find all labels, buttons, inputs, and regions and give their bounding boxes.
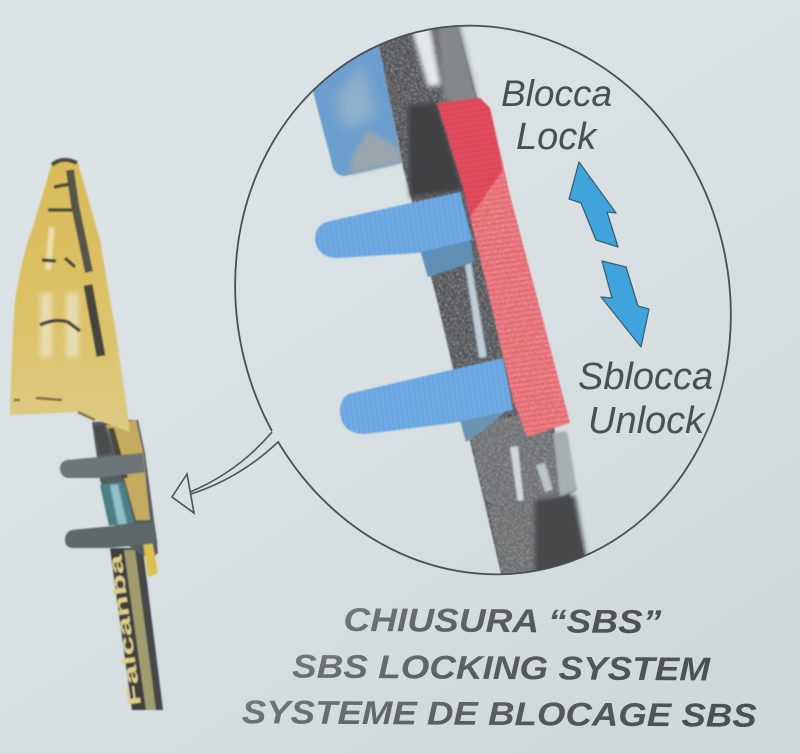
- lower shaft: [105, 548, 163, 710]
- yellow cone: [10, 158, 130, 432]
- label: Sblocca / Unlock: Sblocca: [578, 356, 713, 398]
- label: Sblocca / Unlock: [578, 356, 713, 442]
- caption: SBS LOCKING SYSTEM: [292, 648, 712, 687]
- lower clear sleeve: [470, 416, 589, 574]
- caption: SYSTEME DE BLOCAGE SBS: [242, 693, 757, 734]
- blue lever upper: [315, 192, 474, 277]
- caption: [242, 600, 758, 734]
- product: complete device on the left: [10, 158, 163, 710]
- grey lever upper: [60, 453, 145, 478]
- label: Sblocca / Unlock: Unlock: [588, 400, 706, 442]
- magnified detail inside the circle: [310, 15, 592, 590]
- grey lever lower: [65, 522, 157, 548]
- caption: CHIUSURA “SBS”: [343, 601, 662, 640]
- dark shaft: [375, 15, 592, 590]
- locking body: [92, 420, 158, 577]
- label: Blocca / Lock: [501, 73, 612, 158]
- label: Blocca / Lock: Lock: [516, 116, 598, 158]
- arrow up: lock direction: [569, 162, 618, 247]
- blue lever lower: [340, 358, 513, 442]
- label: Blocca / Lock: Blocca: [501, 73, 612, 114]
- magnifier circle outline: [178, 0, 788, 627]
- arrow down: unlock direction: [601, 261, 649, 347]
- red locking slider: [437, 98, 570, 437]
- brand lettering on shaft: Falcanba: [105, 552, 145, 707]
- blue top clip: [312, 46, 402, 177]
- callout arrow to the device: [172, 432, 278, 513]
